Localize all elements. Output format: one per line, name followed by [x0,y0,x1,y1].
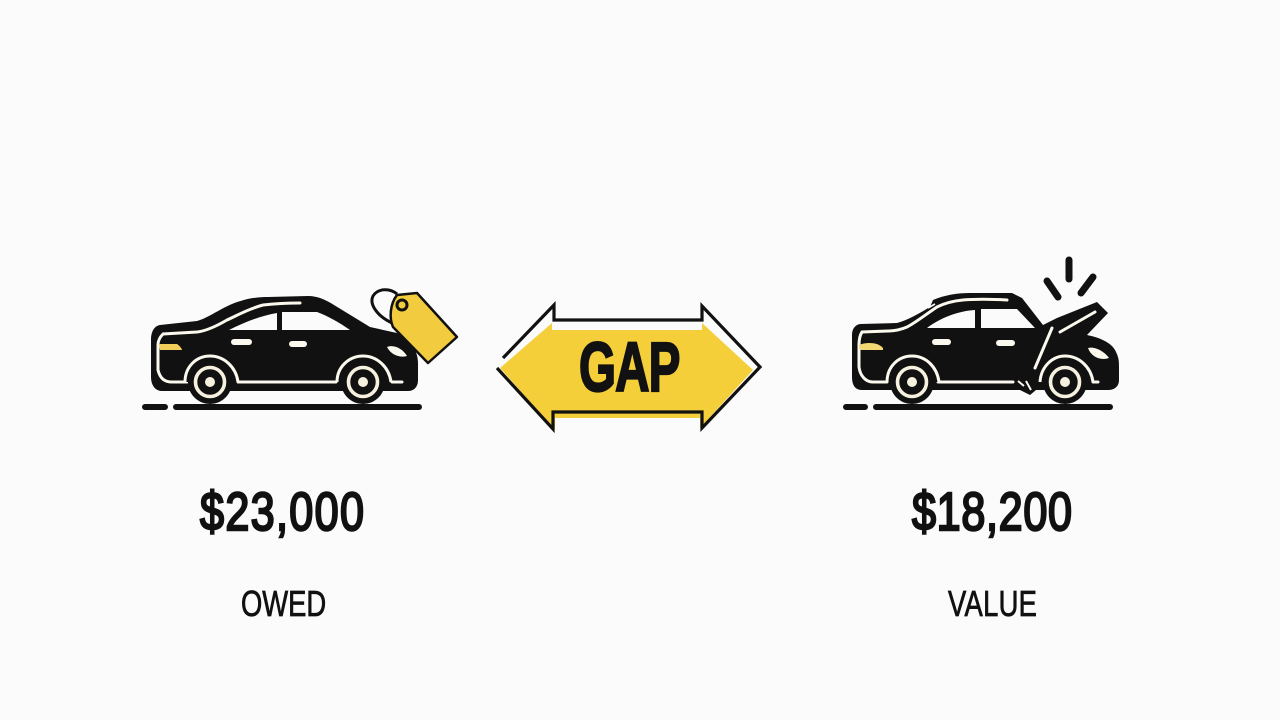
label: GAP: GAP [579,328,680,406]
wheels [188,360,385,404]
panel: value car with crash damage [846,260,1119,407]
icon: car body [852,293,1119,395]
taillight [159,344,182,350]
icon: car body [151,296,418,391]
bonnet highlight [1060,312,1095,332]
door handles [231,339,252,345]
tag hole [397,300,407,310]
taillight [859,343,883,350]
icon: tag loop [372,290,397,323]
windows [927,309,1035,328]
body highlight line [158,303,402,382]
body highlight line [859,299,1098,382]
door handles [932,339,951,345]
road [145,404,419,410]
icon: impact marks [1047,260,1093,297]
wheel arches [887,356,1093,382]
arrow outlines [497,305,760,429]
bumper damage [1018,381,1031,390]
arrow fill [500,323,753,430]
headlight [387,346,407,357]
wheel arches [185,356,391,382]
roof notch [928,304,935,308]
headlight [1088,348,1109,359]
label: value: VALUE [948,583,1037,624]
figure: amount owed: $23,000 [200,483,364,542]
icon: price tag [391,293,457,363]
windows [229,312,350,330]
panel: owed car with price tag [145,290,457,407]
label: owed: OWED [241,583,326,624]
crumple crease [1035,328,1052,368]
figure: vehicle value: $18,200 [912,483,1072,542]
road [846,404,1110,410]
wheels [890,360,1087,404]
arrow: GAP double-headed arrow [497,305,760,430]
